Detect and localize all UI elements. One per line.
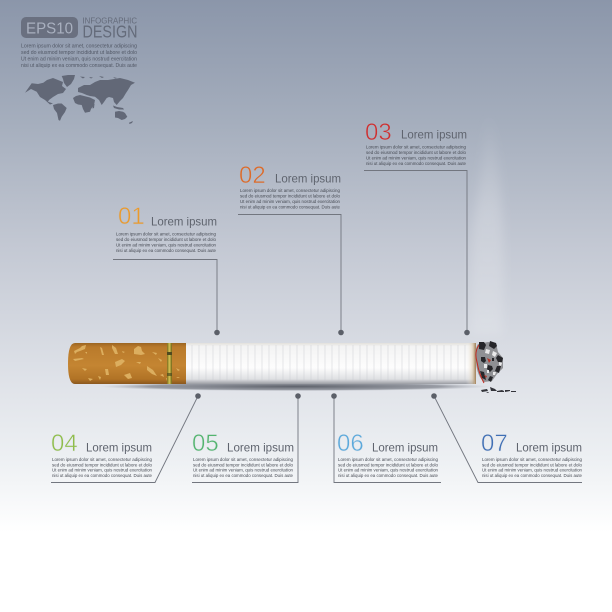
header text block: nisi ut aliquip ex ea commodo consequat. Duis aute	[21, 63, 137, 69]
callout 04: 04	[51, 430, 78, 457]
callout 01: Lorem ipsum dolor sit amet, consectetur adipiscing	[116, 232, 216, 238]
header text block: Lorem ipsum dolor sit amet, consectetur adipiscing	[21, 44, 137, 50]
callout 06: Lorem ipsum dolor sit amet, consectetur adipiscing	[338, 457, 438, 463]
callout 03: 03	[365, 119, 392, 146]
callout 01: Lorem ipsum	[151, 214, 217, 228]
filter speckles	[73, 345, 180, 381]
callout 07: Lorem ipsum dolor sit amet, consectetur adipiscing	[482, 457, 582, 463]
callout 06: Ut enim ad minim veniam, quis nostrud exercitation	[338, 468, 438, 474]
fallen ash	[481, 387, 516, 393]
callout 03: sed do eiusmod tempor incididunt ut labore et dolo	[366, 150, 466, 156]
callout 01: 01	[118, 203, 145, 230]
heading: infographic design: DESIGN	[82, 22, 138, 42]
smoke	[470, 108, 503, 335]
callout 05: nisi ut aliquip ex ea commodo consequat. Duis aute	[193, 473, 293, 479]
callout 06: Lorem ipsum	[372, 440, 438, 454]
callout 01: Ut enim ad minim veniam, quis nostrud exercitation	[116, 242, 216, 248]
callout 05: Ut enim ad minim veniam, quis nostrud exercitation	[193, 468, 293, 474]
paper	[186, 343, 474, 384]
callout 04	[51, 393, 201, 482]
callout 07	[431, 393, 582, 482]
shadow	[100, 382, 490, 391]
callout 03: Lorem ipsum dolor sit amet, consectetur adipiscing	[366, 144, 466, 150]
burn edge	[466, 343, 476, 384]
callout 06	[331, 393, 441, 482]
header text block: Ut enim ad minim veniam, quis nostrud exercitation	[21, 57, 137, 63]
header text block	[21, 44, 137, 69]
callout 02: 02	[239, 162, 266, 189]
callout 05	[192, 393, 301, 482]
callout 07: Lorem ipsum	[516, 440, 582, 454]
callout 02: Lorem ipsum dolor sit amet, consectetur adipiscing	[240, 188, 340, 194]
callout 05: Lorem ipsum dolor sit amet, consectetur adipiscing	[193, 457, 293, 463]
callout 03: nisi ut aliquip ex ea commodo consequat. Duis aute	[366, 161, 466, 167]
callout 02: sed do eiusmod tempor incididunt ut labore et dolo	[240, 194, 340, 200]
callout 02	[238, 162, 344, 335]
callout 07: sed do eiusmod tempor incididunt ut labore et dolo	[482, 462, 582, 468]
header badge: EPS10: EPS10	[26, 20, 73, 38]
ember and ash	[475, 341, 516, 393]
callout 05: Lorem ipsum	[227, 440, 294, 454]
callout 05: sed do eiusmod tempor incididunt ut labore et dolo	[193, 462, 293, 468]
callout 07: nisi ut aliquip ex ea commodo consequat. Duis aute	[482, 473, 582, 479]
callout 05: 05	[192, 430, 219, 457]
callout 06: sed do eiusmod tempor incididunt ut labore et dolo	[338, 462, 438, 468]
callout 04: Lorem ipsum	[86, 440, 152, 454]
callout 04: nisi ut aliquip ex ea commodo consequat. Duis aute	[52, 473, 152, 479]
filter	[68, 343, 186, 384]
cigarette	[68, 343, 490, 391]
paper ribs	[192, 345, 465, 381]
callout 03: Lorem ipsum	[401, 128, 467, 142]
callout 02: Lorem ipsum	[275, 172, 341, 186]
callout 01: sed do eiusmod tempor incididunt ut labore et dolo	[116, 237, 216, 243]
gold band	[167, 343, 172, 384]
callout 06: nisi ut aliquip ex ea commodo consequat. Duis aute	[338, 473, 438, 479]
callout 04: Ut enim ad minim veniam, quis nostrud exercitation	[52, 468, 152, 474]
callout 06: 06	[337, 430, 364, 457]
callout 02: Ut enim ad minim veniam, quis nostrud exercitation	[240, 199, 340, 205]
heading: infographic design	[82, 16, 138, 42]
callout 07: Ut enim ad minim veniam, quis nostrud exercitation	[482, 468, 582, 474]
callout 01: nisi ut aliquip ex ea commodo consequat. Duis aute	[116, 248, 216, 254]
callout 03	[364, 119, 470, 335]
header text block: sed do eiusmod tempor incididunt ut labore et dolo	[21, 50, 137, 56]
callout 01	[113, 203, 220, 335]
callout 04: sed do eiusmod tempor incididunt ut labore et dolo	[52, 462, 152, 468]
icon: world map	[25, 75, 135, 124]
callout 02: nisi ut aliquip ex ea commodo consequat. Duis aute	[240, 204, 340, 210]
callout 03: Ut enim ad minim veniam, quis nostrud exercitation	[366, 156, 466, 162]
header badge: EPS10	[21, 17, 78, 38]
callout 07: 07	[481, 430, 508, 457]
heading: infographic design: INFOGRAPHIC	[82, 16, 137, 26]
callout 04: Lorem ipsum dolor sit amet, consectetur adipiscing	[52, 457, 152, 463]
